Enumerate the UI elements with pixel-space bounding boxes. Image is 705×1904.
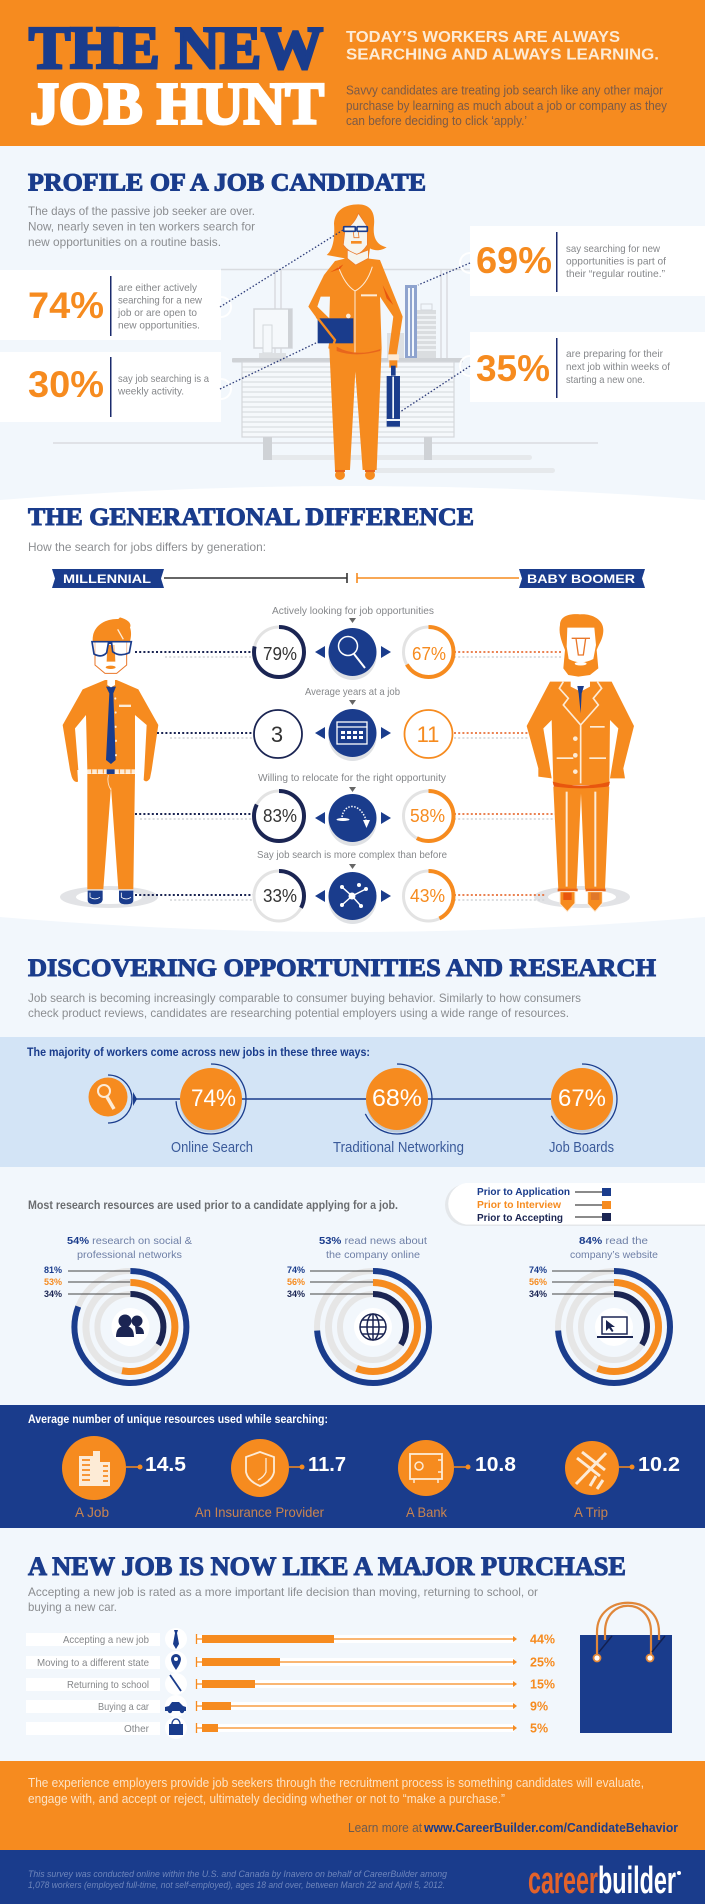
dotted callout lines (220, 230, 470, 412)
bar row: returning to school (26, 1673, 555, 1695)
icon: globe (360, 1314, 386, 1340)
title: THE NEW (29, 15, 323, 81)
bar row: returning to school: 15% (530, 1678, 555, 1692)
heading: major purchase: A NEW JOB IS NOW LIKE A MAJOR PURCHASE (28, 1552, 626, 1581)
stat: insurance provider: 11.7 (308, 1454, 346, 1476)
profile intro text: The days of the passive job seeker are over. (28, 204, 255, 218)
stat box 69%: say searching for new (566, 243, 660, 255)
stat box 69%: their “regular routine.” (566, 268, 665, 280)
comparison row 1 (254, 605, 454, 680)
heading: discovering opportunities: DISCOVERING OPPORTUNITIES AND RESEARCH (28, 953, 656, 982)
office background illustration (53, 270, 598, 473)
donut chart: company news: 34% (287, 1289, 305, 1299)
bar row: accepting a new job (26, 1628, 555, 1650)
donut chart: social networks: 54% research on social & (67, 1235, 192, 1247)
bar row: returning to school: Returning to school (67, 1679, 149, 1691)
circle: 67% job boards: 67% (558, 1085, 606, 1112)
stat: trip: A Trip (574, 1504, 608, 1520)
icon: people (116, 1314, 144, 1337)
closing banner: engage with, and accept or reject, ultimately deciding whether or not to “make a purchase.” (28, 1792, 505, 1806)
panel: three ways: The majority of workers come across new jobs in these three ways: (27, 1047, 370, 1059)
ribbon: millennial: MILLENNIAL (63, 572, 151, 586)
bar row: buying a car: 9% (530, 1700, 548, 1714)
bar row: other (26, 1717, 548, 1739)
stat: a job: 14.5 (145, 1454, 186, 1476)
profile intro text (28, 204, 255, 249)
figure: millennial man (60, 617, 158, 908)
closing banner: Learn more at (348, 1821, 422, 1835)
comparison row 3 (254, 772, 454, 846)
comparison row 2: Average years at a job (305, 686, 400, 698)
bar row: buying a car (26, 1695, 548, 1717)
stat box 35%: 35% (476, 348, 550, 389)
title (29, 15, 324, 136)
survey note: 1,078 workers (employed full-time, not self-employed), ages 18 and over, between March 22 and April 5, 2012. (28, 1880, 445, 1891)
circle: 68% traditional networking: Traditional Networking (333, 1139, 464, 1156)
donut chart: company news: 53% read news about (319, 1235, 427, 1247)
donut chart: company website: 34% (529, 1289, 547, 1299)
discovering intro text: Job search is becoming increasingly comparable to consumer buying behavior. Similarly to how consumers (28, 991, 581, 1005)
circle: 68% traditional networking (333, 1064, 464, 1156)
bar row: buying a car: Buying a car (98, 1701, 149, 1713)
stat: a job (62, 1436, 186, 1520)
survey note (28, 1869, 448, 1891)
stat box 30%: weekly activity. (117, 386, 184, 398)
heading: profile: PROFILE OF A JOB CANDIDATE (28, 170, 426, 197)
timeline header (52, 569, 645, 588)
stat box 35%: starting a new one. (566, 374, 645, 386)
stat box 30%: say job searching is a (118, 373, 209, 385)
stat: insurance provider (195, 1439, 346, 1520)
stat: a job: A Job (75, 1504, 109, 1520)
title: JOB HUNT (30, 70, 324, 136)
bar row: moving to a different state (26, 1651, 555, 1673)
stat: bank (398, 1440, 516, 1520)
subtitle: SEARCHING AND ALWAYS LEARNING. (346, 46, 659, 64)
donut chart: social networks (44, 1235, 192, 1383)
donut chart: social networks: 81% (44, 1265, 62, 1275)
ring: boomer 11 years (404, 710, 452, 758)
research subheading: Most research resources are used prior to a candidate applying for a job. (28, 1198, 398, 1212)
circle: 74% online search: Online Search (171, 1139, 253, 1156)
stat box 35%: next job within weeks of (566, 361, 670, 373)
stat: trip: 10.2 (638, 1454, 680, 1476)
panel: unique resources: Average number of unique resources used while searching: (28, 1414, 328, 1426)
bar chart: life decisions (26, 1628, 555, 1739)
circle: 68% traditional networking: 68% (372, 1085, 422, 1112)
ring: millennial 33% (254, 871, 304, 921)
circle: 67% job boards: Job Boards (549, 1139, 614, 1156)
legend: Prior to Application (477, 1187, 570, 1198)
donut chart: company website: company’s website (570, 1249, 658, 1261)
icon: search badge (88, 1075, 137, 1123)
comparison row 2 (254, 686, 452, 761)
donut chart: company news: the company online (326, 1249, 420, 1261)
stat box 74%: are either actively (118, 282, 198, 294)
ribbon: millennial (52, 569, 164, 588)
discovering intro text: check product reviews, candidates are researching potential employers using a wide range of resources. (28, 1006, 569, 1020)
intro text: purchase by learning as much about a job or company as they (346, 99, 668, 113)
logo: careerbuilder: career (528, 1860, 598, 1902)
closing banner: The experience employers provide job seekers through the recruitment process is something candidates will evaluate, (28, 1776, 644, 1790)
stat box 35% (460, 332, 705, 402)
bar row: accepting a new job: 44% (530, 1632, 555, 1646)
donut chart: social networks: 53% (44, 1277, 62, 1287)
ring: boomer 67% (404, 627, 454, 677)
donut chart: company website (529, 1235, 670, 1383)
ring: boomer 58% (404, 791, 454, 841)
profile intro text: Now, nearly seven in ten workers search for (28, 220, 255, 234)
ring: millennial 83% (254, 791, 304, 841)
bar row: moving to a different state: Moving to a different state (37, 1657, 149, 1669)
ribbon: baby boomer (519, 569, 645, 588)
generational section background (0, 486, 705, 932)
purchase intro text (28, 1585, 538, 1614)
stat box 74% (0, 270, 231, 340)
donut chart: company website: 74% (529, 1265, 547, 1275)
dotted connectors left (135, 652, 254, 900)
stat: bank: A Bank (406, 1504, 448, 1520)
legend: Prior to Interview (477, 1200, 561, 1211)
ring: millennial 3 years (254, 710, 302, 758)
stat box 74%: new opportunities. (118, 320, 200, 332)
stat box 74%: job or are open to (117, 307, 197, 319)
bar row: moving to a different state: 25% (530, 1656, 555, 1670)
donut chart: company news: 56% (287, 1277, 305, 1287)
panel: unique resources (0, 1405, 705, 1528)
stat: bank: 10.8 (475, 1454, 516, 1476)
generational subtitle: How the search for jobs differs by generation: (28, 540, 266, 554)
ring: millennial 79% (254, 627, 304, 677)
stat box 69%: 69% (476, 240, 552, 281)
ring: boomer 11 years: 11 (417, 722, 439, 747)
subtitle (346, 29, 659, 64)
stat box 30% (0, 352, 231, 422)
stat box 30%: 30% (28, 364, 104, 405)
figure: baby boomer man (527, 614, 634, 912)
donut chart: company news: 74% (287, 1265, 305, 1275)
donut chart: social networks: professional networks (77, 1249, 182, 1261)
ring: boomer 67%: 67% (412, 644, 446, 664)
survey note: This survey was conducted online within the U.S. and Canada by Inavero on behalf of CareerBuilder among (28, 1869, 448, 1880)
purchase intro text: buying a new car. (28, 1600, 117, 1614)
intro text: can before deciding to click ‘apply.’ (346, 114, 527, 128)
comparison row 3: Willing to relocate for the right opportunity (258, 772, 447, 784)
intro text (346, 84, 668, 128)
ring: boomer 43% (404, 871, 454, 921)
donut chart: company news (287, 1235, 429, 1383)
icon: calendar (315, 709, 391, 761)
figure: job candidate woman (308, 204, 403, 480)
comparison row 4: Say job search is more complex than before (257, 849, 447, 861)
ring: millennial 3 years: 3 (271, 722, 283, 747)
ring: boomer 58%: 58% (410, 806, 445, 826)
stat box 69% (460, 226, 705, 296)
ring: millennial 79%: 79% (263, 644, 297, 664)
icon: shopping bag (580, 1603, 672, 1733)
icon: laptop cursor (597, 1317, 633, 1337)
panel: three ways (0, 1037, 705, 1167)
bar row: other: Other (124, 1723, 149, 1735)
donut chart: company website: 84% read the (579, 1235, 648, 1247)
closing banner (0, 1761, 705, 1850)
footer (0, 1850, 705, 1904)
donut chart: company website: 56% (529, 1277, 547, 1287)
dotted connectors right (454, 652, 562, 900)
purchase intro text: Accepting a new job is rated as a more important life decision than moving, returning to school, or (28, 1585, 538, 1599)
profile intro text: new opportunities on a routine basis. (28, 235, 221, 249)
header banner (0, 0, 705, 146)
legend (445, 1183, 705, 1226)
circle: 74% online search (171, 1064, 253, 1156)
stat box 35%: are preparing for their (566, 348, 663, 360)
comparison row 1: Actively looking for job opportunities (272, 605, 434, 617)
stat: insurance provider: An Insurance Provider (195, 1504, 324, 1520)
closing banner: www.CareerBuilder.com/CandidateBehavior (423, 1821, 678, 1835)
bar row: accepting a new job: Accepting a new job (63, 1634, 149, 1646)
stat: trip (565, 1441, 680, 1520)
discovering intro text (28, 991, 581, 1020)
legend: Prior to Accepting (477, 1213, 563, 1224)
ring: millennial 33%: 33% (263, 886, 297, 906)
icon: relocate arc (315, 794, 391, 846)
stat box 69%: opportunities is part of (566, 256, 666, 268)
bar row: other: 5% (530, 1722, 548, 1736)
subtitle: TODAY’S WORKERS ARE ALWAYS (346, 29, 620, 46)
stat box 74%: 74% (28, 285, 104, 326)
ribbon: baby boomer: BABY BOOMER (527, 572, 635, 586)
ring: boomer 43%: 43% (410, 886, 445, 906)
heading: generational difference: THE GENERATIONAL DIFFERENCE (28, 504, 474, 531)
stat box 74%: searching for a new (118, 294, 202, 306)
icon: magnifier (315, 628, 391, 680)
intro text: Savvy candidates are treating job search like any other major (346, 84, 663, 98)
ring: millennial 83%: 83% (263, 806, 297, 826)
donut chart: social networks: 34% (44, 1289, 62, 1299)
icon: network (315, 872, 391, 924)
circle: 74% online search: 74% (191, 1085, 236, 1112)
comparison row 4 (254, 849, 454, 924)
circle: 67% job boards (547, 1064, 617, 1156)
